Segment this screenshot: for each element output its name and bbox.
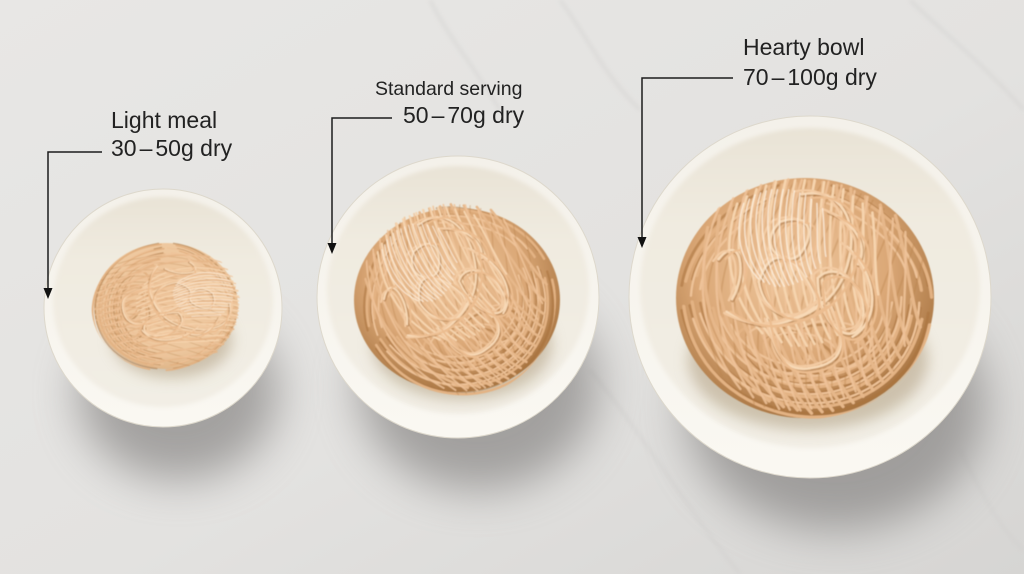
callout: hearty bowl: 70–100g dry <box>743 64 877 90</box>
callout: standard serving <box>328 78 525 254</box>
callout: light meal: 30–50g dry <box>111 135 233 161</box>
bowl: hearty bowl <box>629 116 991 530</box>
bowl: light meal <box>44 189 282 480</box>
noodles: standard serving <box>318 153 602 446</box>
bowl: standard serving <box>317 153 602 490</box>
callout: light meal <box>44 107 233 299</box>
callout: standard serving: Standard serving <box>375 78 522 100</box>
noodles: light meal <box>80 239 251 377</box>
callout: light meal: Light meal <box>111 107 217 133</box>
callout: hearty bowl <box>638 34 877 248</box>
noodles: hearty bowl <box>672 160 945 438</box>
callout: hearty bowl: Hearty bowl <box>743 34 864 60</box>
callout: standard serving: 50–70g dry <box>403 102 525 128</box>
